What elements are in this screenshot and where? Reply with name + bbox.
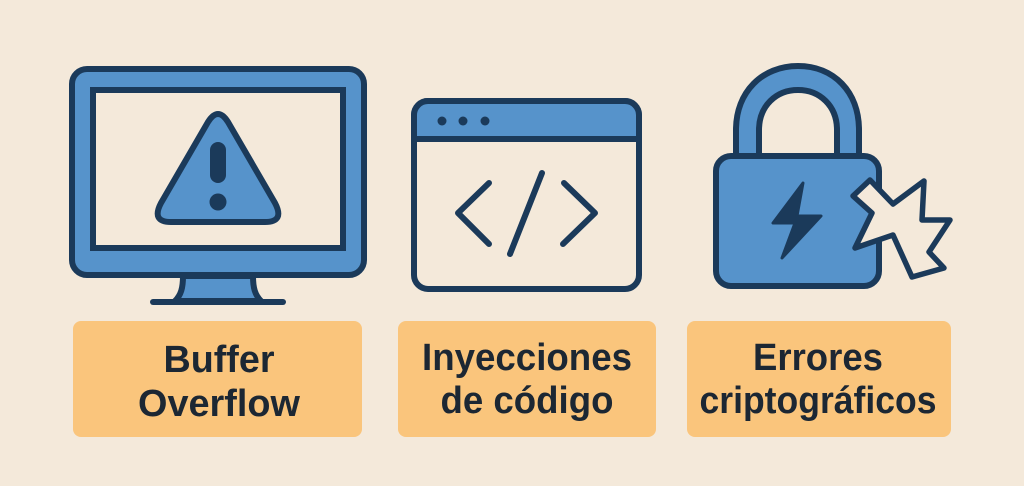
label: Errores criptográficos: Errores <box>753 337 883 379</box>
icon: monitor with warning <box>72 69 364 302</box>
label: Errores criptográficos <box>687 321 951 437</box>
label: Inyecciones de código: de código <box>440 380 614 422</box>
label: Inyecciones de código <box>398 321 656 437</box>
label: Errores criptográficos: criptográficos <box>700 380 936 422</box>
label: Buffer Overflow <box>73 321 362 437</box>
icon: broken padlock <box>716 66 950 286</box>
label: Buffer Overflow: Buffer <box>164 339 275 381</box>
label: Buffer Overflow: Overflow <box>138 383 300 425</box>
icon: code window <box>414 101 639 289</box>
label: Inyecciones de código: Inyecciones <box>422 337 632 379</box>
